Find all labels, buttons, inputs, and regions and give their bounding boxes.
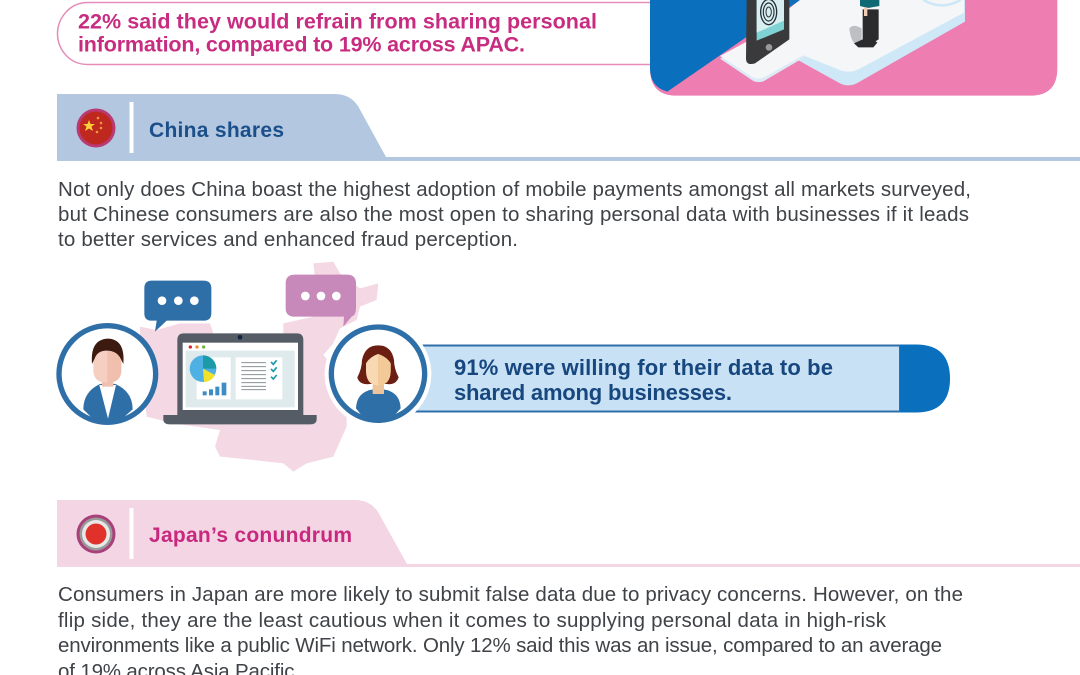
illustration: biometric phone on platform (650, 0, 1057, 96)
section heading: Japan's conundrum: Japan’s conundrum (149, 524, 352, 547)
text block: Japan paragraph (58, 583, 963, 675)
illustration: China map with two people and laptop (59, 262, 431, 472)
person: woman (331, 327, 425, 420)
white halo behind woman (325, 321, 431, 427)
text block: Japan paragraph: environments like a public WiFi network. Only 12% said this was an issue, compared to an average (58, 634, 942, 657)
person: man (59, 326, 156, 422)
text block: China paragraph: to better services and enhanced fraud perception. (58, 228, 518, 251)
text block: China paragraph: but Chinese consumers are also the most open to sharing personal data with businesses if it leads (58, 203, 969, 226)
section heading: Japan's conundrum (57, 500, 1080, 567)
text block: Japan paragraph: flip side, they are the least cautious when it comes to supplying personal data in high-risk (58, 609, 887, 632)
callout: refrain from sharing (58, 2, 652, 64)
section heading: China shares (57, 94, 1080, 161)
callout: refrain from sharing: information, compared to 19% across APAC. (78, 32, 525, 56)
text block: China paragraph (58, 178, 971, 251)
callout: 91% willing: shared among businesses. (454, 380, 732, 405)
speech bubble: blue (144, 281, 211, 332)
map of China (140, 262, 378, 472)
callout: 91% willing (400, 344, 950, 412)
section heading: China shares: China shares (149, 119, 284, 142)
callout: 91% willing: 91% were willing for their data to be (454, 355, 833, 380)
icon: China flag (76, 108, 116, 148)
callout: refrain from sharing: 22% said they would refrain from sharing personal (78, 10, 597, 34)
text block: Japan paragraph: Consumers in Japan are more likely to submit false data due to privacy concerns. However, on the (58, 583, 963, 606)
speech bubble: purple (286, 275, 356, 327)
icon: Japan flag (76, 514, 116, 554)
icon: laptop with dashboard (163, 333, 317, 424)
text block: China paragraph: Not only does China boast the highest adoption of mobile payments amongst all markets surveyed, (58, 178, 971, 201)
